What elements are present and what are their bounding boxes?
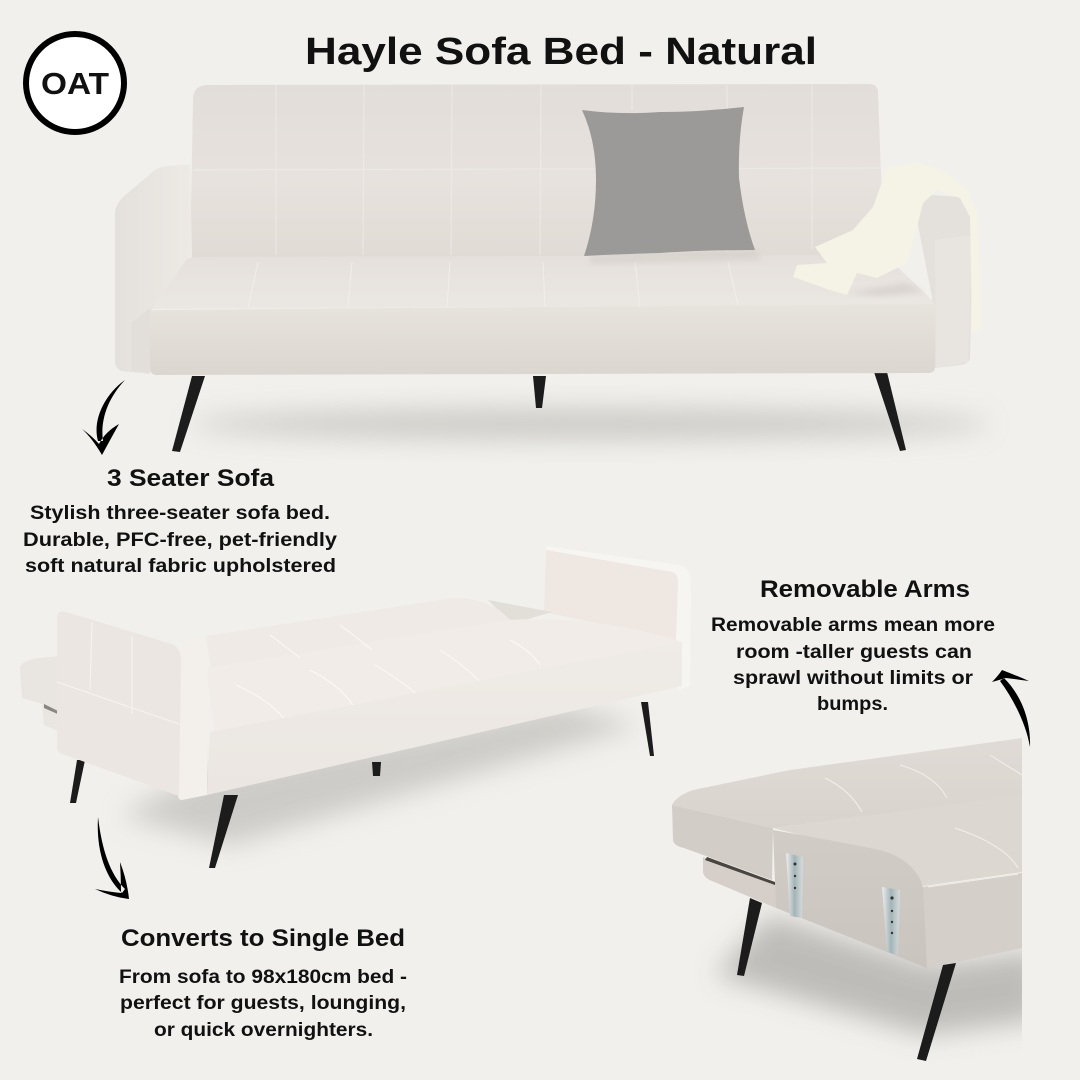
text block: 3 Seater Sofa: 3 Seater Sofa: [107, 465, 275, 492]
arrow: to 3 seater sofa: [82, 380, 125, 455]
right arm: [917, 195, 973, 368]
text block: Removable Arms: Removable Arms: [760, 576, 970, 603]
folded gap: [44, 704, 60, 715]
far arm panel: [544, 550, 678, 640]
metal bracket one: [786, 853, 803, 918]
right leg: [917, 963, 956, 1061]
text block: Removable Arms: sprawl without limits or: [733, 668, 974, 689]
left arm: [115, 165, 192, 374]
backrest tufting: [193, 85, 880, 255]
text block: 3 Seater Sofa: soft natural fabric upholstered: [25, 556, 336, 577]
seat front: [150, 304, 935, 375]
cream throw: [793, 162, 982, 332]
hinge shadow: [488, 600, 552, 620]
arrow: to converts to single bed: [95, 817, 129, 899]
corner front face: [925, 917, 1022, 968]
text block: Converts to Single Bed: [119, 925, 407, 1041]
top face: [672, 738, 1022, 828]
logo: OAT badge: [26, 34, 124, 132]
left arm shade: [132, 308, 150, 373]
seat top: [152, 255, 934, 309]
throw shadow: [845, 283, 925, 296]
legs: [172, 372, 906, 452]
seat top: [206, 619, 682, 733]
text block: Removable Arms: Removable arms mean more: [711, 615, 995, 636]
sofa: upright front view: [115, 84, 990, 452]
folded section behind arm: [20, 656, 60, 732]
lower fold: [703, 857, 776, 908]
cushion shadow: [590, 250, 762, 264]
logo: OAT badge: OAT: [41, 66, 109, 101]
sofa: flat bed view: [20, 546, 691, 868]
arm panel stitching: [57, 622, 179, 724]
text block: Converts to Single Bed: Converts to Single Bed: [121, 925, 405, 952]
bracket holes two: [890, 896, 894, 934]
seat tufting: [236, 625, 540, 722]
lower block top: [773, 795, 1022, 886]
text block: Converts to Single Bed: perfect for guests, lounging,: [120, 993, 406, 1014]
text block: Removable Arms: room -taller guests can: [736, 642, 972, 663]
sofa: detail of removable arm brackets: [672, 738, 1040, 1061]
grey cushion: [582, 107, 755, 256]
text block: 3 Seater Sofa: Durable, PFC-free, pet-friendly: [23, 530, 337, 551]
text block: Converts to Single Bed: or quick overnighters.: [154, 1020, 373, 1041]
floor shadow: [120, 705, 640, 845]
text block: 3 Seater Sofa: [23, 465, 337, 577]
bracket holes: [794, 862, 796, 889]
lower block front: [773, 830, 1022, 968]
floor shadow: [715, 915, 1040, 1035]
right arm face: [935, 235, 972, 368]
near arm end: [178, 635, 208, 800]
metal bracket two: [882, 887, 900, 955]
arrow: to removable arms: [992, 670, 1030, 747]
seat tufting: [248, 262, 738, 308]
text block: Converts to Single Bed: From sofa to 98x180cm bed -: [119, 967, 407, 988]
seat front: [207, 642, 682, 795]
back cushion flat: [206, 598, 530, 690]
legs: [70, 702, 654, 868]
text block: 3 Seater Sofa: Stylish three-seater sofa bed.: [30, 503, 330, 524]
far arm rim: [544, 546, 691, 690]
text block: Removable Arms: [711, 576, 995, 715]
near arm panel: [57, 612, 181, 796]
floor shadow: [190, 409, 990, 439]
title: Hayle Sofa Bed - Natural: [305, 31, 817, 73]
tuft lines: [825, 755, 1022, 887]
backrest: [190, 84, 884, 258]
left leg: [737, 898, 762, 976]
text block: Removable Arms: bumps.: [817, 694, 888, 715]
upper block front: [672, 805, 773, 880]
dark gap: [705, 857, 775, 885]
